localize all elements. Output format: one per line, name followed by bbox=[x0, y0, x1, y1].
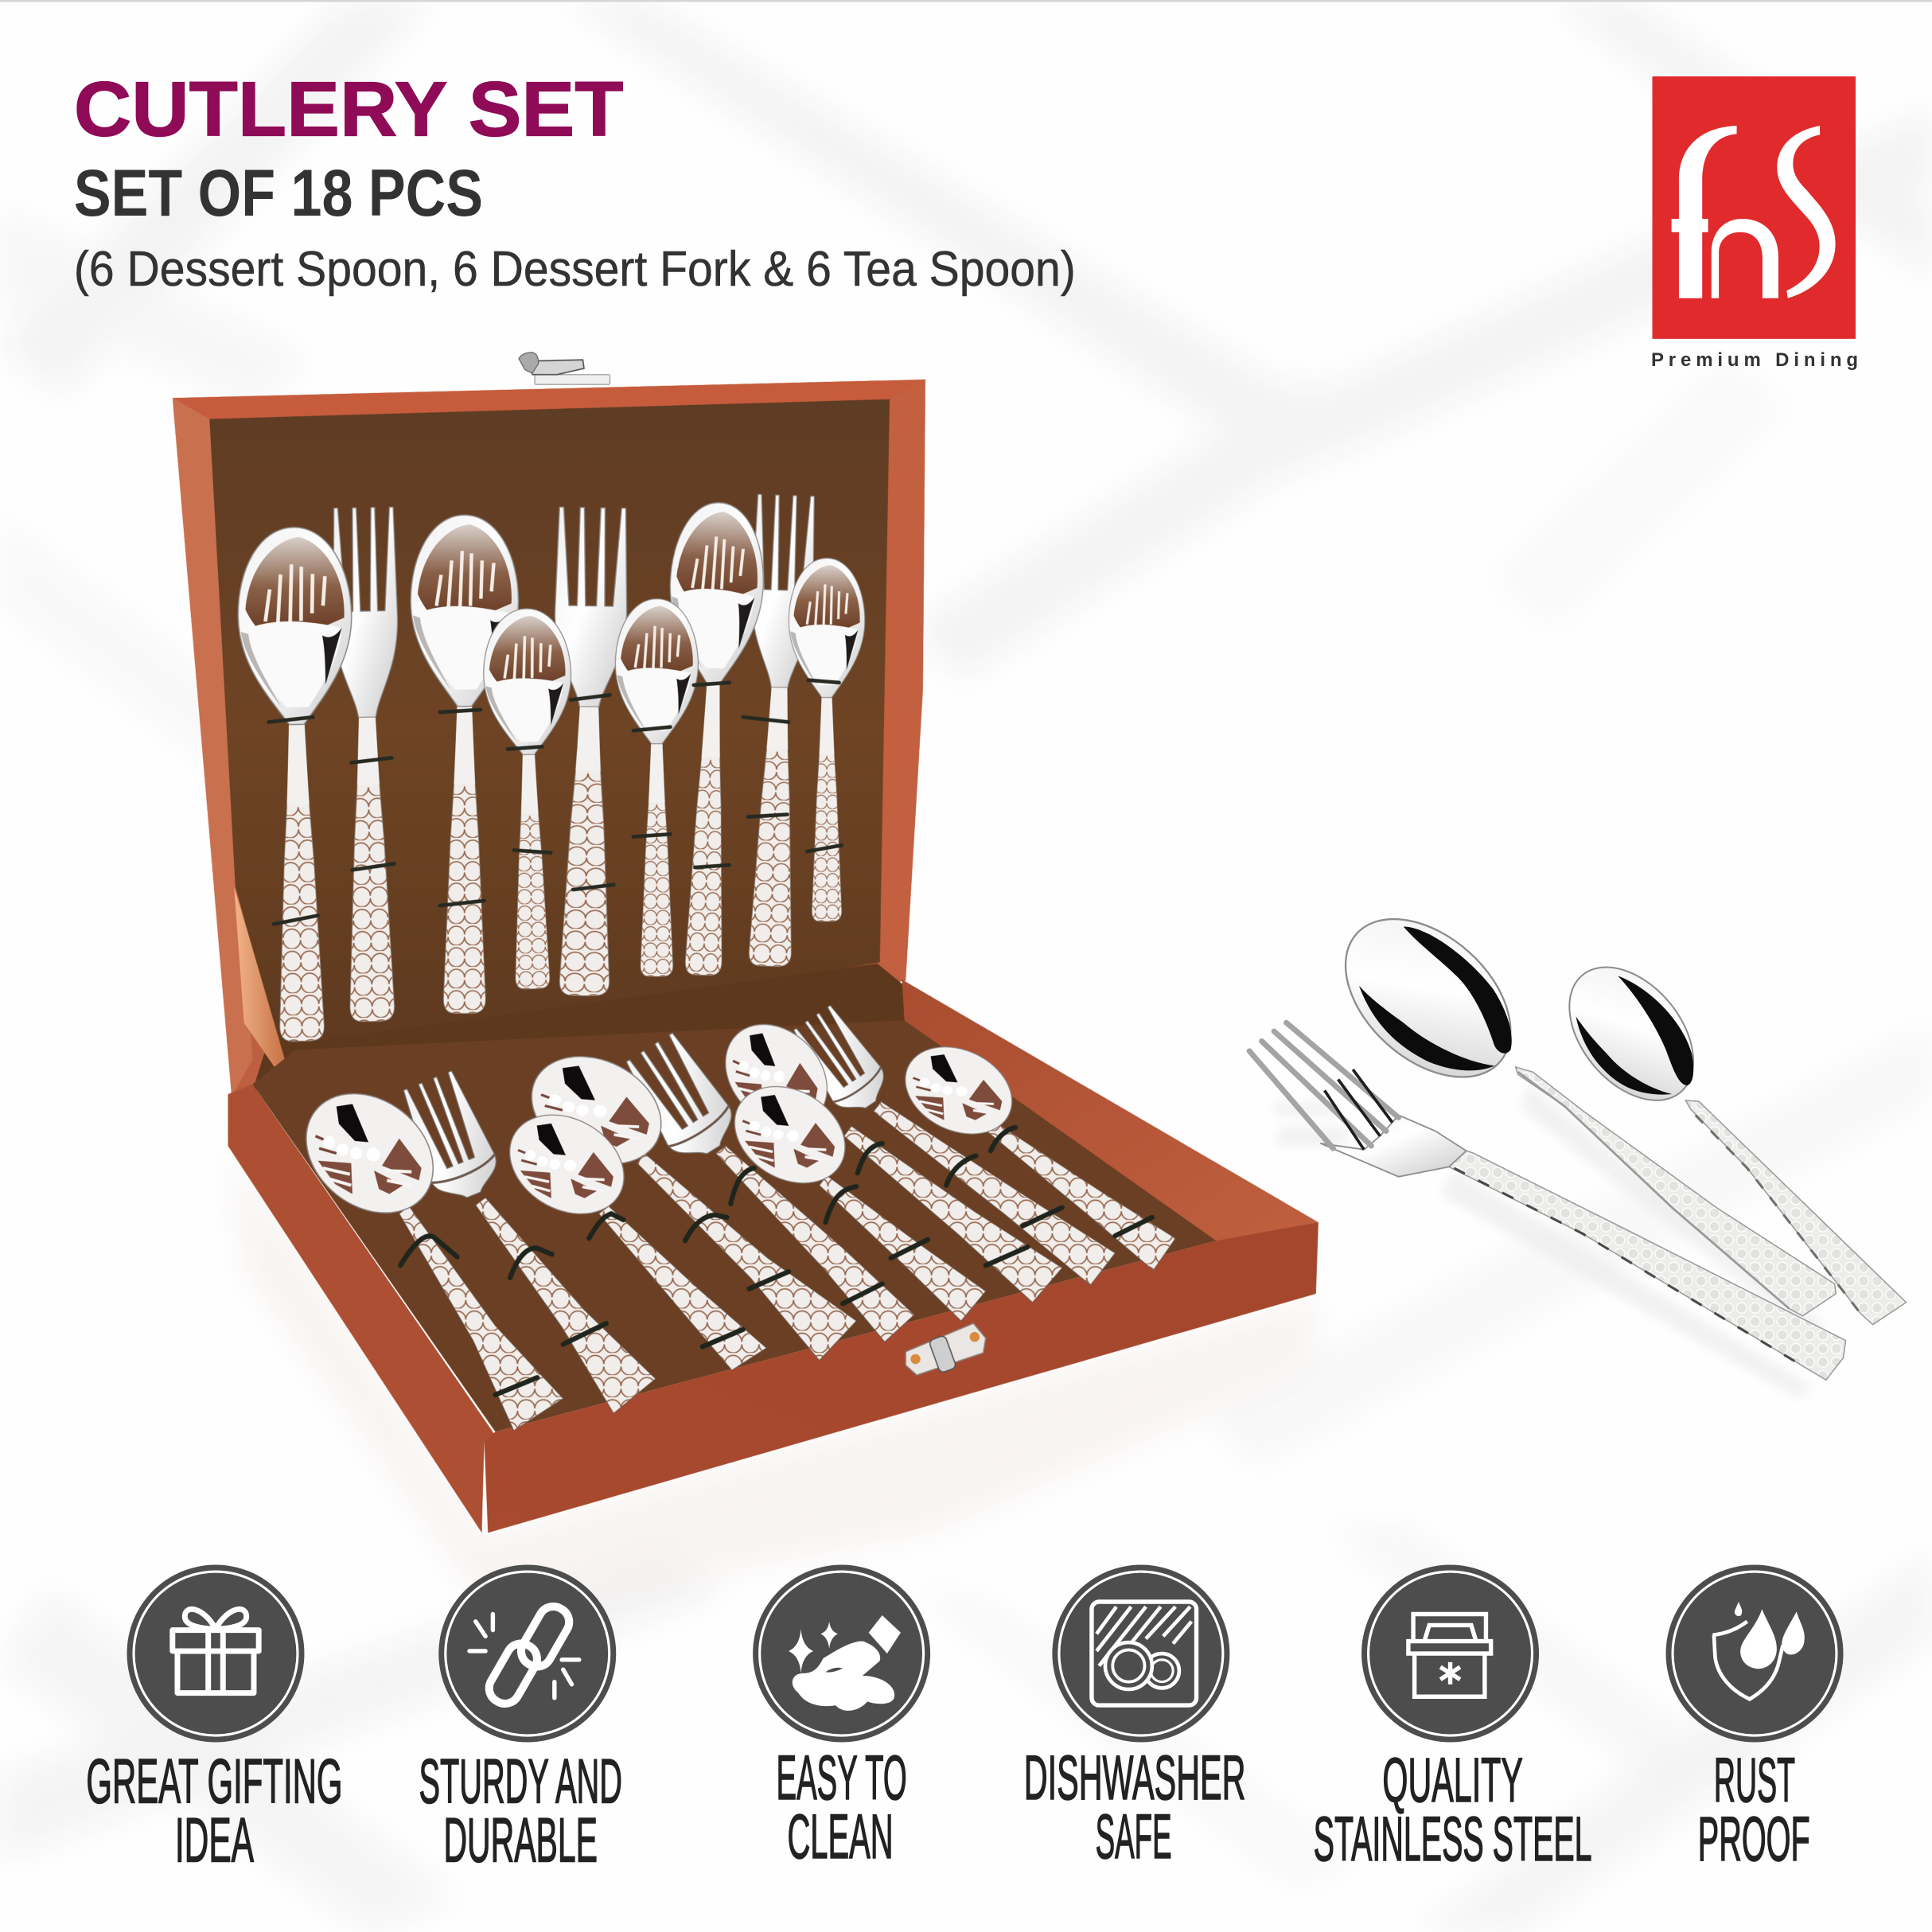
feature: easy to clean bbox=[753, 1565, 930, 1872]
title: CUTLERY SET bbox=[74, 65, 624, 152]
text: STAINLESS STEEL bbox=[1314, 1804, 1592, 1874]
feature: quality stainless steel bbox=[1314, 1565, 1592, 1874]
label: PROOF bbox=[1698, 1804, 1810, 1874]
feature: rust proof bbox=[1666, 1565, 1844, 1874]
icon: chain bbox=[438, 1565, 616, 1743]
lid bbox=[173, 380, 925, 1096]
feature: great gifting idea bbox=[86, 1565, 342, 1876]
subtitle: SET OF 18 PCS bbox=[74, 155, 483, 230]
lid clasp bbox=[519, 353, 610, 384]
label bbox=[777, 1743, 907, 1872]
cutlery box bbox=[173, 353, 1319, 1614]
box reflection bbox=[232, 1146, 1319, 1614]
label: CLEAN bbox=[787, 1802, 894, 1872]
label bbox=[1024, 1743, 1246, 1872]
contents line: (6 Dessert Spoon, 6 Dessert Fork & 6 Tea Spoon) bbox=[74, 242, 1076, 297]
label bbox=[419, 1746, 622, 1876]
feature: dishwasher safe bbox=[1024, 1565, 1246, 1872]
label: DURABLE bbox=[443, 1805, 598, 1876]
logo bbox=[1651, 76, 1858, 371]
icon: shield and drops bbox=[1666, 1565, 1844, 1743]
fork bbox=[1249, 1022, 1846, 1380]
label: DISHWASHER bbox=[1024, 1743, 1246, 1813]
tray rings bbox=[400, 1128, 1152, 1395]
spoon handles bbox=[399, 1206, 563, 1431]
big spoon bbox=[1315, 888, 1836, 1316]
fork handles bbox=[476, 1198, 656, 1413]
orange flap bbox=[234, 887, 292, 1085]
label bbox=[1314, 1745, 1592, 1874]
box base left wall bbox=[228, 1085, 495, 1533]
velvet fold bbox=[252, 964, 907, 1090]
front panel bbox=[485, 1222, 1319, 1533]
front clasp bbox=[906, 1323, 986, 1375]
icon: spill bbox=[753, 1565, 930, 1743]
logo: Premium Dining bbox=[1651, 349, 1858, 371]
box base right wall bbox=[902, 980, 1319, 1245]
upright cutlery bbox=[236, 494, 865, 1042]
icon: gift bbox=[127, 1565, 304, 1743]
label bbox=[86, 1746, 342, 1876]
label: IDEA bbox=[175, 1805, 254, 1876]
label: QUALITY bbox=[1382, 1745, 1523, 1815]
tray cutlery bbox=[282, 1001, 1175, 1431]
icon: cooler box bbox=[1361, 1565, 1539, 1743]
floor bbox=[252, 1020, 1216, 1431]
label: RUST bbox=[1714, 1745, 1795, 1815]
label: SAFE bbox=[1096, 1802, 1172, 1872]
label bbox=[1698, 1745, 1810, 1874]
small spoon bbox=[1544, 944, 1906, 1325]
label: STURDY AND bbox=[419, 1746, 622, 1816]
label: GREAT GIFTING bbox=[86, 1746, 342, 1816]
icon: dishwasher bbox=[1052, 1565, 1229, 1743]
feature: sturdy and durable bbox=[419, 1565, 622, 1876]
lid velvet bbox=[209, 399, 890, 1060]
trio shadows bbox=[1276, 1085, 1824, 1399]
cutlery trio bbox=[1249, 888, 1906, 1399]
upright rings bbox=[269, 680, 842, 924]
feature: easy to clean: EASY TO bbox=[777, 1743, 907, 1813]
